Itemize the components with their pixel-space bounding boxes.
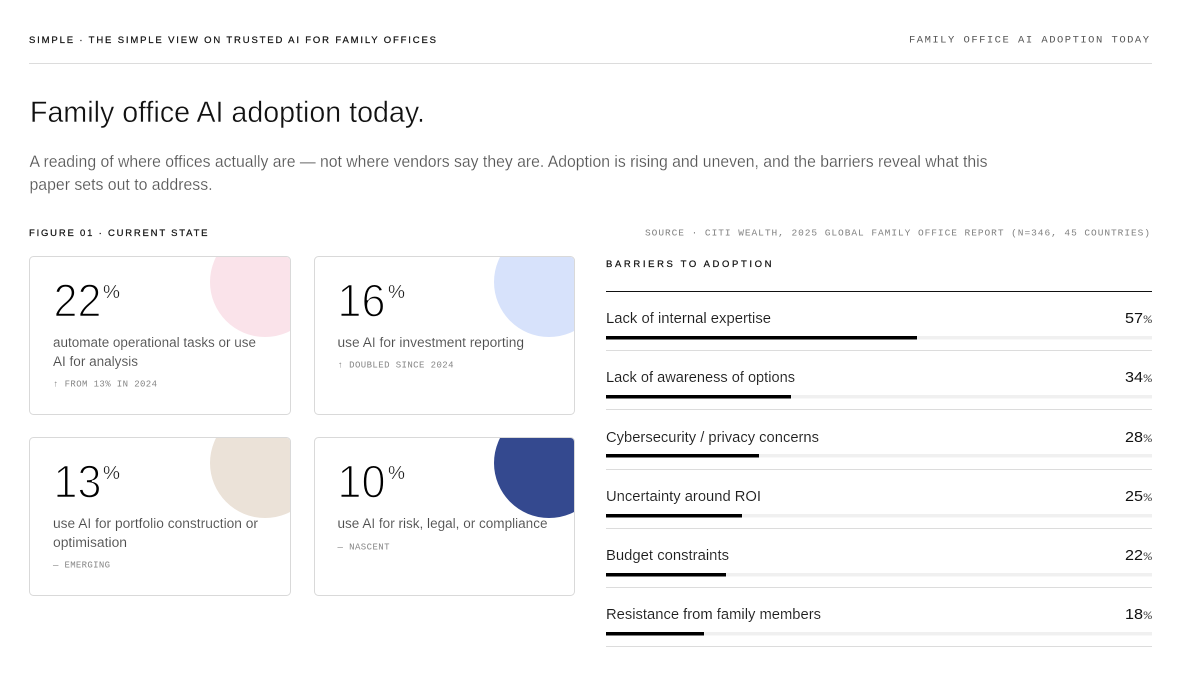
bar row: resistance from family <box>606 606 1153 647</box>
bar row: cybersecurity <box>606 429 1153 470</box>
title: Family office AI adoption today. <box>30 96 425 129</box>
bar row: uncertainty around ROI <box>606 488 1153 529</box>
bar row: internal expertise <box>606 310 1153 351</box>
stat number: 22 <box>54 274 102 326</box>
description <box>53 335 256 369</box>
bar row: awareness of options: Lack of awareness of options <box>606 370 795 386</box>
header right label: FAMILY OFFICE AI ADOPTION TODAY <box>909 34 1150 46</box>
bar row: resistance from family: Resistance from family members <box>606 607 821 623</box>
bar row: internal expertise: Lack of internal expertise <box>606 311 771 327</box>
stat number: 16 <box>338 274 386 326</box>
percent sign: % <box>103 282 120 302</box>
bar row: internal expertise: 57 <box>1125 310 1143 327</box>
panel: stat card 16% <box>314 256 575 415</box>
bar row: cybersecurity: Cybersecurity / privacy concerns <box>606 430 819 446</box>
panel: stat card 22% <box>29 256 291 415</box>
header left label: SIMPLE · THE SIMPLE VIEW ON TRUSTED AI FOR FAMILY OFFICES <box>29 35 436 46</box>
description: use AI for investment reporting <box>338 335 524 350</box>
trend note: — NASCENT <box>336 542 390 552</box>
description: AI for analysis <box>53 354 138 369</box>
barriers heading: BARRIERS TO ADOPTION <box>606 259 772 270</box>
bar row: resistance from family: 18 <box>1125 606 1143 623</box>
bar row: internal expertise: % <box>1144 315 1153 327</box>
description: optimisation <box>53 535 127 550</box>
bar row: budget constraints <box>606 547 1153 588</box>
stat number: 10 <box>338 456 386 508</box>
icon: tan circle <box>210 438 290 518</box>
bar row: uncertainty around ROI: % <box>1144 493 1153 505</box>
icon: pink circle <box>210 257 290 337</box>
bar row: awareness of options <box>606 369 1153 410</box>
description <box>53 516 259 550</box>
stat number: 13 <box>54 456 102 508</box>
trend note: ↑ DOUBLED SINCE 2024 <box>338 360 454 370</box>
bar row: budget constraints: Budget constraints <box>606 548 729 564</box>
intro paragraph: A reading of where offices actually are — not where vendors say they are. Adoption is rising and uneven, and the barriers reveal what this <box>30 153 988 171</box>
trend note: ↑ FROM 13% IN 2024 <box>53 380 157 390</box>
icon: blue circle <box>494 257 574 337</box>
figure label: FIGURE 01 · CURRENT STATE <box>29 228 208 239</box>
description: use AI for risk, legal, or compliance <box>338 516 548 531</box>
intro paragraph <box>30 153 988 194</box>
intro paragraph: paper sets out to address. <box>30 176 212 194</box>
bar row: awareness of options: % <box>1144 374 1153 386</box>
panel: stat card 10% <box>314 437 575 596</box>
bar row: budget constraints: 22 <box>1125 547 1143 564</box>
percent sign: % <box>388 463 405 483</box>
icon: navy circle <box>494 438 574 518</box>
bar row: awareness of options: 34 <box>1125 369 1143 386</box>
percent sign: % <box>103 463 120 483</box>
bar row: cybersecurity: % <box>1144 434 1153 446</box>
trend note: — EMERGING <box>52 560 110 570</box>
percent sign: % <box>388 282 405 302</box>
bar row: uncertainty around ROI: Uncertainty around ROI <box>606 489 761 505</box>
description: automate operational tasks or use <box>53 335 256 350</box>
description: use AI for portfolio construction or <box>53 516 259 531</box>
source line: SOURCE · CITI WEALTH, 2025 GLOBAL FAMILY OFFICE REPORT (N=346, 45 COUNTRIES) <box>645 228 1150 238</box>
bar row: cybersecurity: 28 <box>1125 429 1143 446</box>
bar row: uncertainty around ROI: 25 <box>1125 488 1143 505</box>
header bar <box>29 34 1152 64</box>
bar row: resistance from family: % <box>1144 611 1153 623</box>
panel: stat card 13% <box>29 437 291 596</box>
bar row: budget constraints: % <box>1144 552 1153 564</box>
panel: barriers to adoption <box>606 259 1153 647</box>
